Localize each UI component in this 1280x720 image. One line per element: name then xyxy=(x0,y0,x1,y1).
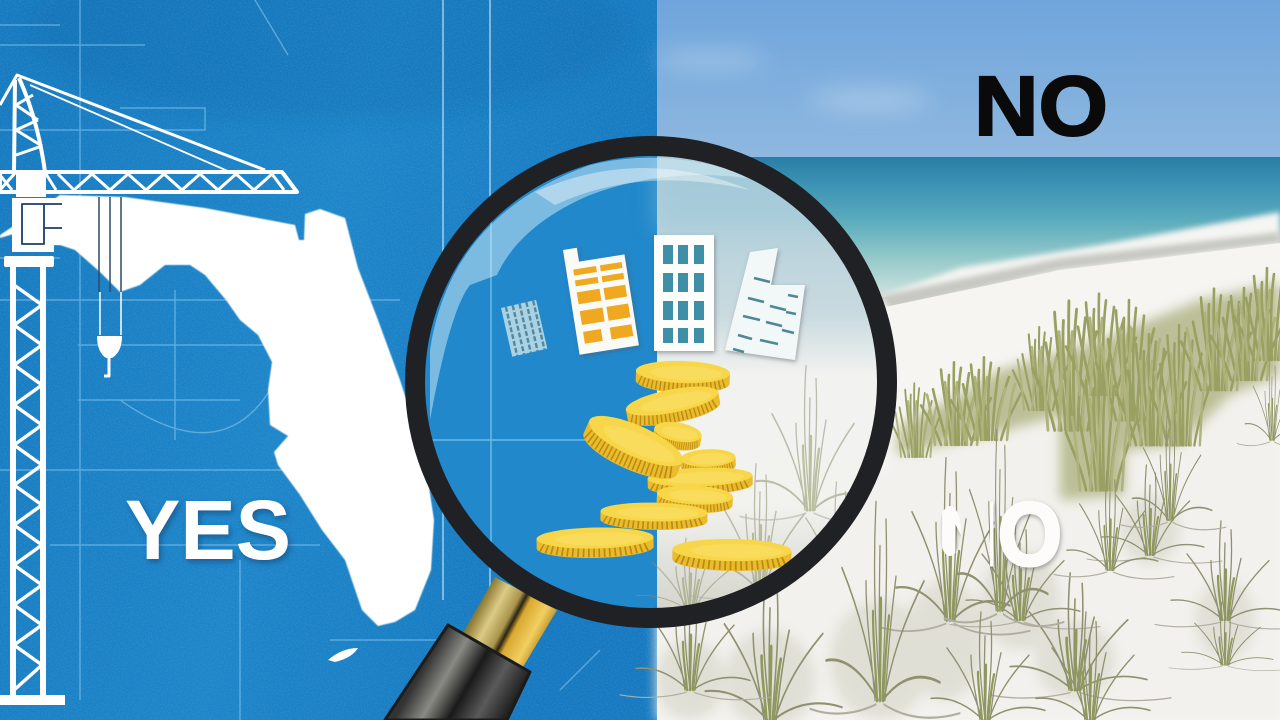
heading: NO in sky: NO xyxy=(974,59,1108,153)
icon: magnifying glass xyxy=(385,146,912,720)
panel: NO beach background xyxy=(655,0,1280,720)
panel: YES blueprint background xyxy=(0,0,660,720)
beach grass xyxy=(620,268,1280,720)
icon: orange window building xyxy=(563,241,639,355)
lens contents xyxy=(426,156,876,608)
icon: pale building cluster xyxy=(725,248,805,360)
Florida keys island xyxy=(328,648,358,662)
state of Florida silhouette xyxy=(0,195,434,626)
heading: YES: YES xyxy=(125,483,291,577)
icon: coin stack xyxy=(536,359,792,572)
magnifier rim xyxy=(415,146,887,618)
icon: small grey building xyxy=(501,300,547,357)
icon: white tower with teal windows xyxy=(654,235,714,351)
magnifier handle xyxy=(385,577,557,720)
icon: construction crane xyxy=(0,75,297,705)
lens glare xyxy=(430,158,760,420)
sky xyxy=(657,0,1280,158)
heading: NO on sand, white and nearly invisible: NO xyxy=(938,485,1062,585)
